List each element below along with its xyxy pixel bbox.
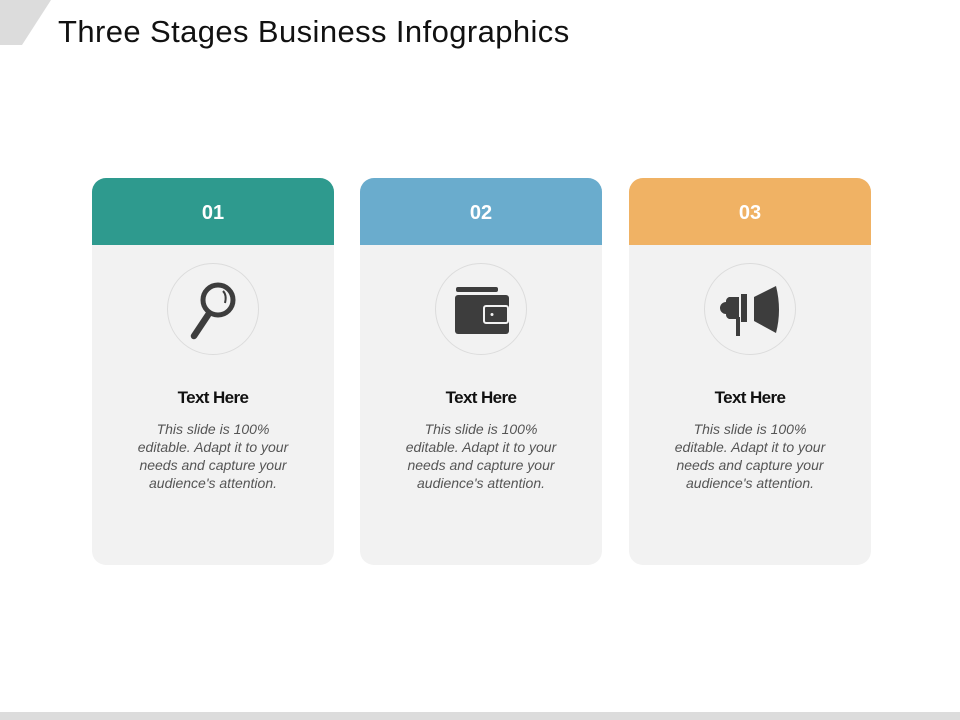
header 02 — [360, 178, 602, 245]
title: Three Stages Business Infographics — [58, 14, 570, 49]
heading: Text Here — [178, 388, 248, 407]
body text: This slide is 100% editable. Adapt it to your needs and capture your audience's attention. — [406, 421, 556, 491]
header 03: 03 — [739, 202, 761, 224]
card 1 — [92, 178, 334, 565]
icon: magnifier — [167, 263, 259, 355]
icon: wallet — [435, 263, 527, 355]
card 2 — [360, 178, 602, 565]
heading: Text Here — [715, 388, 785, 407]
bottom bar — [0, 712, 960, 720]
body text: This slide is 100% editable. Adapt it to your needs and capture your audience's attention. — [138, 421, 288, 491]
corner decoration — [0, 0, 51, 45]
body text: This slide is 100% editable. Adapt it to your needs and capture your audience's attention. — [675, 421, 825, 491]
icon: megaphone — [704, 263, 796, 355]
heading: Text Here — [446, 388, 516, 407]
header 01: 01 — [202, 202, 224, 224]
header 02: 02 — [470, 202, 492, 224]
header 03 — [629, 178, 871, 245]
card 3 — [629, 178, 871, 565]
header 01 — [92, 178, 334, 245]
